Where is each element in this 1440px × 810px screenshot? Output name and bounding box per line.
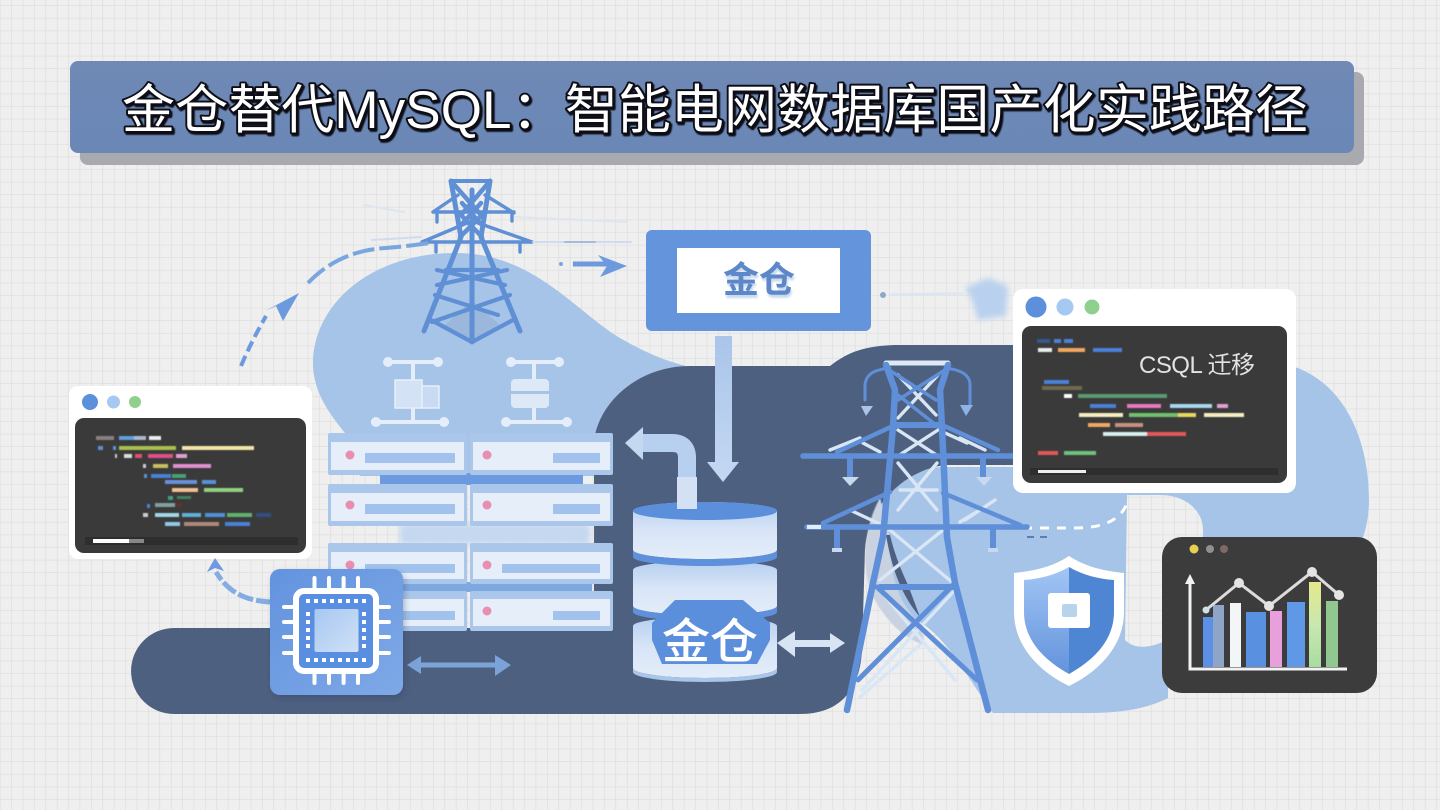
arrow: database to servers <box>625 427 697 507</box>
power line wisps <box>364 205 631 242</box>
left code window <box>69 386 312 559</box>
trend line <box>1202 567 1344 614</box>
axes <box>1190 580 1347 669</box>
server row 4 <box>328 591 613 631</box>
migration code window <box>1013 289 1296 493</box>
server rack <box>328 433 613 631</box>
migration terminal screen <box>1022 326 1287 483</box>
disk 2 <box>633 561 777 621</box>
migration status bar <box>1030 468 1278 475</box>
brand box label: 金仓 <box>723 259 795 300</box>
tower white bracing <box>830 363 995 697</box>
icon: network node 1 <box>371 357 449 427</box>
ghost arrow toward migration window <box>880 278 1008 320</box>
arrow: tower to brand box <box>559 255 627 277</box>
arrow: double headed in base <box>407 655 511 676</box>
icon: security shield <box>1014 556 1124 686</box>
code lines <box>96 436 271 526</box>
terminal screen <box>75 418 306 553</box>
arrow: down from brand box to database <box>707 336 739 482</box>
crescent behind large tower <box>865 498 925 645</box>
brand box <box>646 230 871 331</box>
tower insulator tips <box>832 405 998 552</box>
server rack gaps <box>362 473 592 592</box>
database cylinder <box>633 477 777 682</box>
tower blue structure <box>803 365 1027 710</box>
server row 2 <box>328 484 613 526</box>
icon: top transmission tower <box>422 181 532 342</box>
dark navy base shape <box>131 345 1015 714</box>
database label: 金仓 <box>662 616 758 669</box>
title banner <box>70 61 1364 165</box>
terminal status bar <box>85 537 298 545</box>
arrow: chip to left window <box>207 558 272 602</box>
light blue blob: left <box>313 253 695 476</box>
database badge <box>652 600 770 664</box>
icon: large transmission tower <box>803 363 1027 710</box>
arrow: dashed curve to top tower <box>241 243 430 366</box>
dark wedge behind large tower <box>886 535 920 617</box>
icon: network node 2 <box>501 357 572 427</box>
bars <box>1203 582 1338 667</box>
title: 金仓替代MySQL：智能电网数据库国产化实践路径 <box>122 68 1308 144</box>
migration code lines <box>1037 339 1244 455</box>
icon: processor chip <box>270 569 403 695</box>
migration label: CSQL 迁移 <box>1139 352 1255 379</box>
network icons above servers <box>371 357 572 427</box>
arrow: database to tower <box>777 631 845 657</box>
server row 3 <box>328 543 613 584</box>
disk 1 <box>633 477 777 566</box>
chart panel <box>1162 537 1377 693</box>
light blue blob: right <box>880 367 1369 713</box>
server row 1 <box>328 433 613 475</box>
disk 3 <box>633 617 777 682</box>
dashed connector to migration window <box>1023 500 1128 537</box>
